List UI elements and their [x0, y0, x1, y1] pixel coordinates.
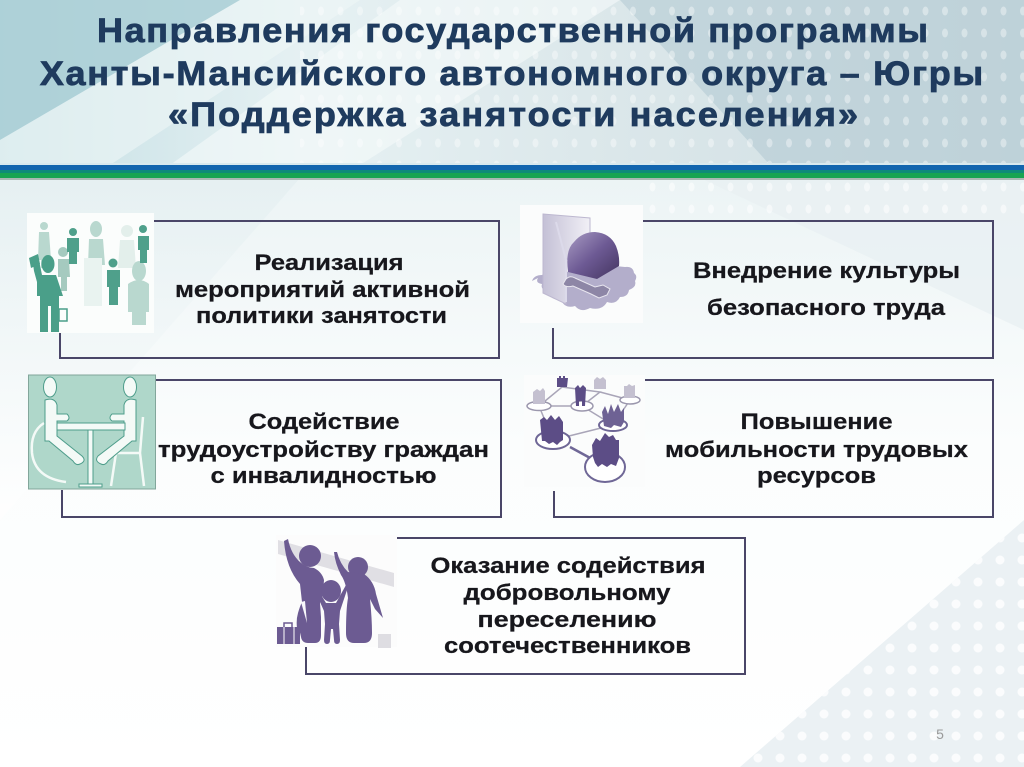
- title: Направления государственной программы: [97, 12, 928, 50]
- panel: active employment policy: Реализация: [254, 250, 404, 275]
- panel: employment of disabled citizens: Содействие: [248, 409, 400, 434]
- panel: active employment policy: [60, 221, 499, 358]
- icon: hard hat with wrench and door: [520, 205, 643, 323]
- icon: crowd of workers: [27, 213, 154, 333]
- panel: labor mobility: ресурсов: [757, 463, 876, 488]
- panel: voluntary resettlement of compatriots: переселению: [478, 607, 656, 632]
- icon: people with wheelchair at table: [28, 375, 156, 489]
- panel: labor mobility: Повышение: [740, 409, 892, 434]
- panel: labor mobility: [554, 380, 993, 517]
- panel: voluntary resettlement of compatriots: добровольному: [464, 580, 671, 605]
- title: «Поддержка занятости населения»: [168, 96, 858, 134]
- panel: employment of disabled citizens: трудоустройству граждан: [158, 437, 489, 462]
- panel: safe labor culture: [553, 221, 993, 358]
- panel: active employment policy: мероприятий активной: [175, 277, 470, 302]
- panel: labor mobility: мобильности трудовых: [665, 437, 969, 462]
- panel: safe labor culture: Внедрение культуры: [693, 258, 960, 283]
- icon: family with suitcase: [276, 535, 397, 648]
- panel: employment of disabled citizens: [62, 380, 501, 517]
- panel: employment of disabled citizens: с инвалидностью: [210, 463, 436, 488]
- title: [40, 12, 983, 134]
- page number: 5: [936, 726, 944, 742]
- panel: voluntary resettlement of compatriots: Оказание содействия: [430, 553, 706, 578]
- panel: voluntary resettlement of compatriots: [306, 538, 745, 674]
- panel: voluntary resettlement of compatriots: соотечественников: [444, 633, 691, 658]
- header background band: [0, 0, 1024, 165]
- panel: active employment policy: политики занятости: [196, 303, 447, 328]
- panel: safe labor culture: безопасного труда: [707, 295, 946, 320]
- title: Ханты-Мансийского автономного округа – Югры: [40, 55, 983, 93]
- icon: people network: [524, 375, 645, 487]
- green and blue divider stripe: [0, 163, 1024, 180]
